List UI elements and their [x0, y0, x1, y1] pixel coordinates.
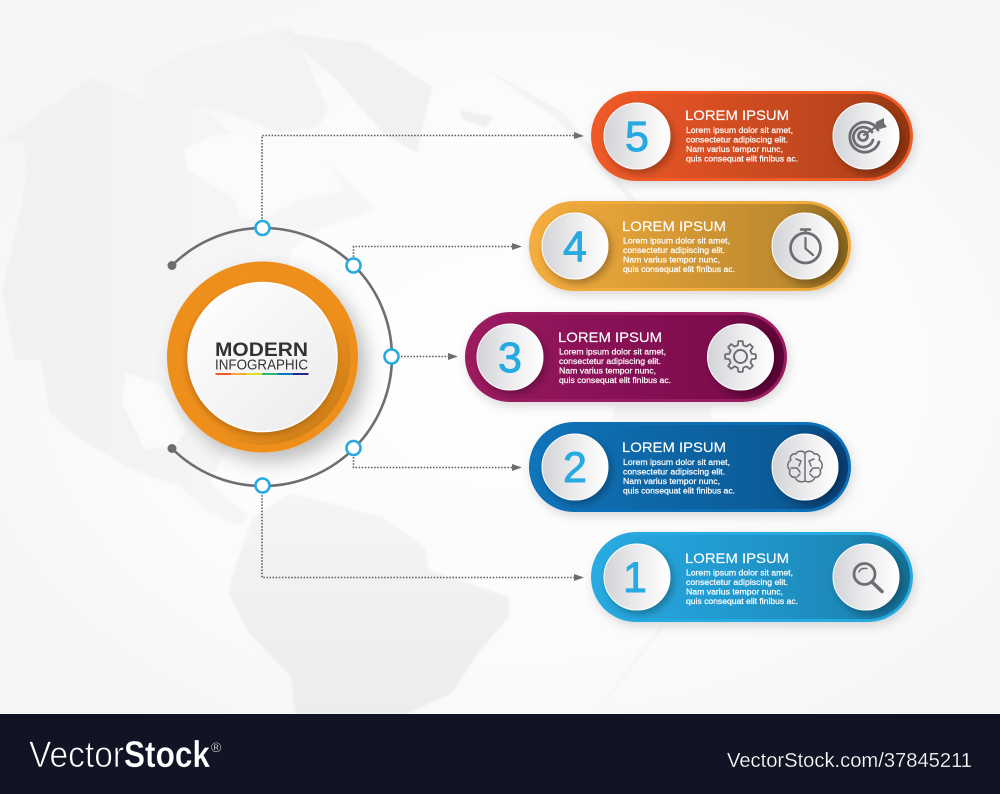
- icon disc: brain: [772, 434, 838, 500]
- icon disc: target: [833, 103, 899, 169]
- icon disc: stopwatch: [772, 213, 838, 279]
- number disc 1: [604, 544, 670, 610]
- body text: Nam varius tempor nunc,: [686, 586, 783, 596]
- body text: Lorem ipsum dolor sit amet,: [686, 125, 793, 135]
- connector: to item 2: [354, 454, 522, 471]
- panel: item 1: [591, 532, 913, 622]
- body text: [686, 568, 798, 606]
- body text: Nam varius tempor nunc,: [686, 144, 783, 154]
- body text: quis consequat elit finibus ac.: [623, 264, 735, 274]
- body text: [559, 346, 671, 385]
- world map backdrop: [0, 27, 711, 714]
- panel: item 5: [591, 91, 913, 181]
- body text: [623, 236, 735, 274]
- icon disc: magnifier: [833, 544, 899, 610]
- number disc 2: [542, 434, 608, 500]
- body text: [623, 457, 735, 496]
- body text: consectetur adipiscing elit.: [686, 577, 788, 587]
- heading: LOREM IPSUM: [685, 550, 789, 566]
- number disc 1: 1: [623, 554, 647, 602]
- number disc 3: 3: [498, 334, 522, 382]
- number disc 4: [542, 213, 608, 279]
- body text: Nam varius tempor nunc,: [623, 254, 720, 264]
- number disc 5: [604, 103, 670, 169]
- body text: quis consequat elit finibus ac.: [623, 486, 735, 496]
- logo: VectorStock: Vector: [29, 734, 124, 775]
- number disc 3: [477, 324, 543, 390]
- body text: consectetur adipiscing elit.: [686, 134, 788, 144]
- number disc 4: 4: [563, 223, 587, 271]
- rainbow underline: [216, 373, 308, 375]
- image reference: VectorStock.com/37845211: [727, 750, 972, 772]
- orbit arc with nodes: [168, 221, 398, 492]
- icon disc: gear: [708, 324, 774, 390]
- body text: quis consequat elit finibus ac.: [559, 375, 671, 385]
- panel: item 4: [529, 201, 851, 291]
- logo: VectorStock: ®: [211, 739, 222, 755]
- body text: Lorem ipsum dolor sit amet,: [623, 236, 730, 246]
- body text: Lorem ipsum dolor sit amet,: [686, 568, 793, 578]
- heading: LOREM IPSUM: [622, 439, 726, 455]
- heading: LOREM IPSUM: [685, 107, 789, 123]
- heading: LOREM IPSUM: [558, 329, 662, 345]
- connector: to item 5: [262, 132, 584, 222]
- body text: consectetur adipiscing elit.: [623, 245, 725, 255]
- number disc 5: 5: [625, 113, 649, 161]
- body text: quis consequat elit finibus ac.: [686, 154, 798, 164]
- logo: VectorStock: Stock: [124, 734, 210, 775]
- body text: [686, 125, 798, 164]
- body text: consectetur adipiscing elit.: [623, 466, 725, 476]
- central badge: [167, 262, 358, 452]
- body text: Lorem ipsum dolor sit amet,: [559, 346, 666, 356]
- body text: Nam varius tempor nunc,: [623, 476, 720, 486]
- connector: to item 1: [262, 492, 584, 581]
- heading: LOREM IPSUM: [622, 218, 726, 234]
- subtitle: infographic: INFOGRAPHIC: [215, 358, 308, 374]
- panel: item 2: [529, 422, 851, 512]
- logo: VectorStock: [29, 734, 222, 775]
- number disc 2: 2: [563, 444, 587, 492]
- connector: to item 3: [398, 353, 458, 360]
- body text: quis consequat elit finibus ac.: [686, 596, 798, 606]
- connector: to item 4: [354, 243, 522, 260]
- body text: Nam varius tempor nunc,: [559, 366, 656, 376]
- body text: consectetur adipiscing elit.: [559, 356, 661, 366]
- title: modern: MODERN: [215, 340, 308, 361]
- footer bar: [0, 714, 1000, 794]
- body text: Lorem ipsum dolor sit amet,: [623, 457, 730, 467]
- panel: item 3: [465, 312, 787, 402]
